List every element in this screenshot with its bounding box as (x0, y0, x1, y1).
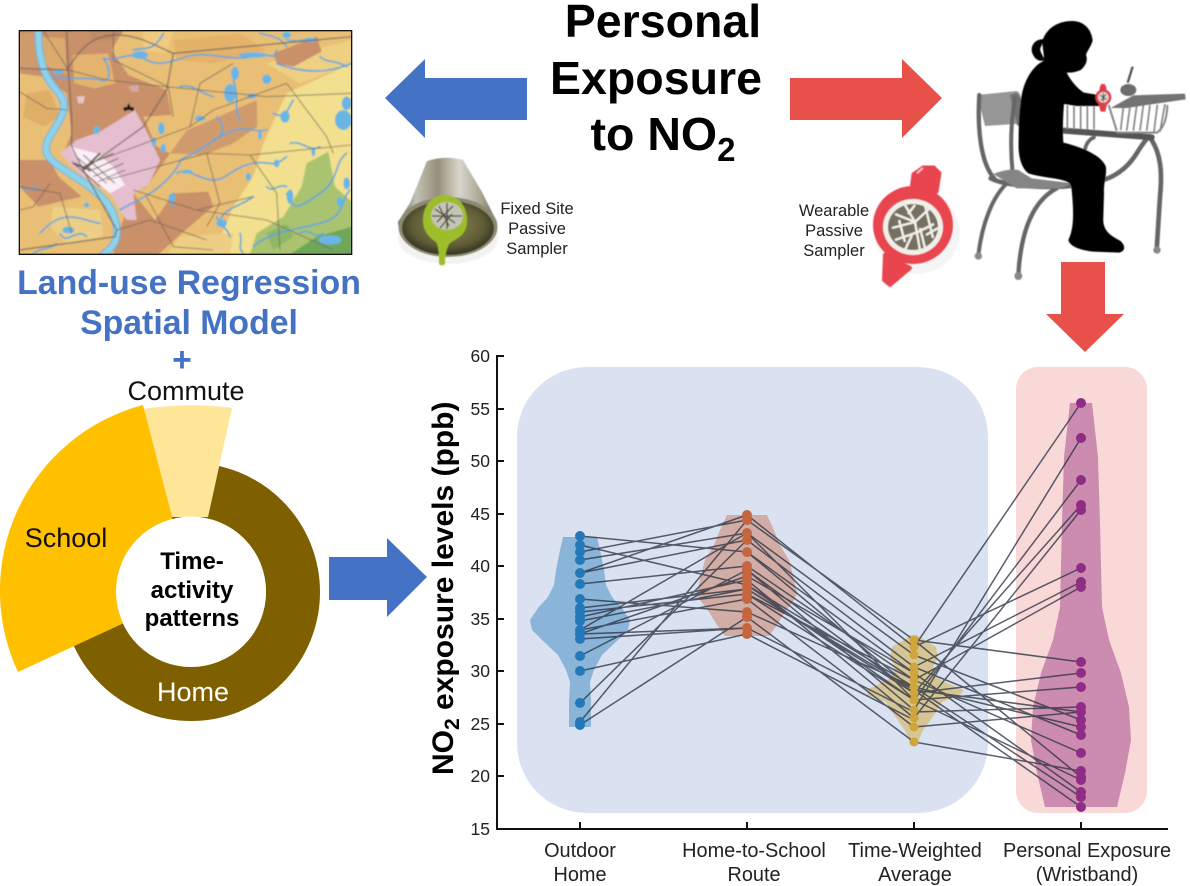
panel: personal exposure (1016, 367, 1147, 813)
y axis tick labels: 60 (471, 346, 490, 366)
silhouette (1019, 21, 1124, 253)
map marker (123, 103, 134, 111)
arrow: blue to chart (329, 538, 427, 617)
title: Exposure (550, 52, 762, 104)
violin: home-to-school route (697, 515, 797, 636)
label: time-activity patterns (145, 548, 239, 632)
x axis labels: (Wristband) (1036, 864, 1138, 886)
paired connecting lines (580, 403, 1081, 807)
map river (38, 30, 117, 257)
ponytail (1032, 39, 1044, 61)
y axis tick labels: 35 (471, 609, 490, 629)
y axis title: exposure levels (ppb) (427, 402, 460, 718)
map city grid (72, 153, 125, 187)
y axis tick labels: 40 (471, 556, 490, 576)
donut centre (116, 516, 266, 666)
chart: NO2 exposure levels (427, 346, 1171, 886)
arrow: red right (790, 59, 942, 138)
icon: wearable passive sampler (873, 167, 960, 285)
label: fixed site passive sampler (500, 200, 574, 258)
points: outdoor home (575, 531, 585, 730)
x axis labels (544, 840, 1171, 886)
points: home-to-school route (742, 510, 752, 639)
label: fixed site passive sampler: Sampler (506, 240, 568, 258)
heading: land-use regression: Spatial Model (80, 304, 298, 342)
label: time-activity patterns: Time- (160, 548, 224, 575)
y axis tick labels: 50 (471, 451, 490, 471)
label: home: Home (157, 677, 229, 707)
label: fixed site passive sampler: Fixed Site (500, 200, 574, 218)
points: time-weighted average (910, 636, 918, 746)
violin: personal exposure (1031, 403, 1131, 807)
segment: home (89, 490, 293, 694)
violin: time-weighted average (866, 635, 964, 745)
wristwatch (1097, 84, 1108, 112)
icon: fixed site passive sampler (398, 158, 498, 266)
chart: time-activity donut (0, 376, 293, 707)
violin: outdoor home (530, 537, 630, 727)
y axis tick labels: 45 (471, 504, 490, 524)
label: fixed site passive sampler: Passive (508, 220, 566, 238)
y axis tick labels: 30 (471, 661, 490, 681)
map roads (19, 30, 352, 250)
chair back (977, 91, 1025, 126)
arrow: blue left (385, 59, 527, 138)
x axis labels: Home-to-School (682, 840, 826, 862)
y axis tick labels: 20 (471, 766, 490, 786)
y axis tick labels: 55 (471, 399, 490, 419)
points: personal exposure (1076, 398, 1086, 812)
x axis labels: Home (553, 864, 607, 886)
heading: land-use regression: Land-use Regression (17, 264, 361, 302)
arrow: red down (1046, 262, 1124, 352)
segment: commute (143, 405, 232, 517)
panel: modelled exposures (517, 367, 988, 813)
desk and frame (978, 95, 1161, 275)
title (550, 0, 762, 168)
map lakes (53, 32, 352, 245)
label: wearable passive sampler (799, 202, 869, 260)
icon: girl at school desk (975, 21, 1186, 280)
y axis tick labels: 25 (471, 714, 490, 734)
x axis labels: Personal Exposure (1003, 840, 1171, 862)
y axis tick labels: 15 (471, 819, 490, 839)
label: time-activity patterns: activity (151, 577, 234, 604)
map streams (20, 33, 352, 253)
panel: land-use map (17, 28, 355, 258)
label: wearable passive sampler: Passive (805, 222, 863, 240)
heading: land-use regression: + (172, 341, 192, 379)
segment: school (0, 405, 191, 672)
title: 2 (717, 131, 735, 168)
x axis labels: Average (878, 864, 952, 886)
x axis labels: Route (727, 864, 781, 886)
label: school: School (25, 523, 107, 553)
x axis labels: Time-Weighted (848, 840, 982, 862)
label: wearable passive sampler: Sampler (803, 242, 865, 260)
y axis title: NO (427, 730, 460, 775)
y axis title: 2 (441, 718, 464, 730)
heading: land-use regression (17, 264, 361, 379)
label: commute: Commute (127, 376, 245, 406)
axes (497, 355, 1168, 829)
y axis tick labels (471, 346, 490, 839)
label: wearable passive sampler: Wearable (799, 202, 869, 220)
x axis labels: Outdoor (544, 840, 616, 862)
title: to NO (591, 108, 717, 160)
label: time-activity patterns: patterns (145, 605, 239, 632)
